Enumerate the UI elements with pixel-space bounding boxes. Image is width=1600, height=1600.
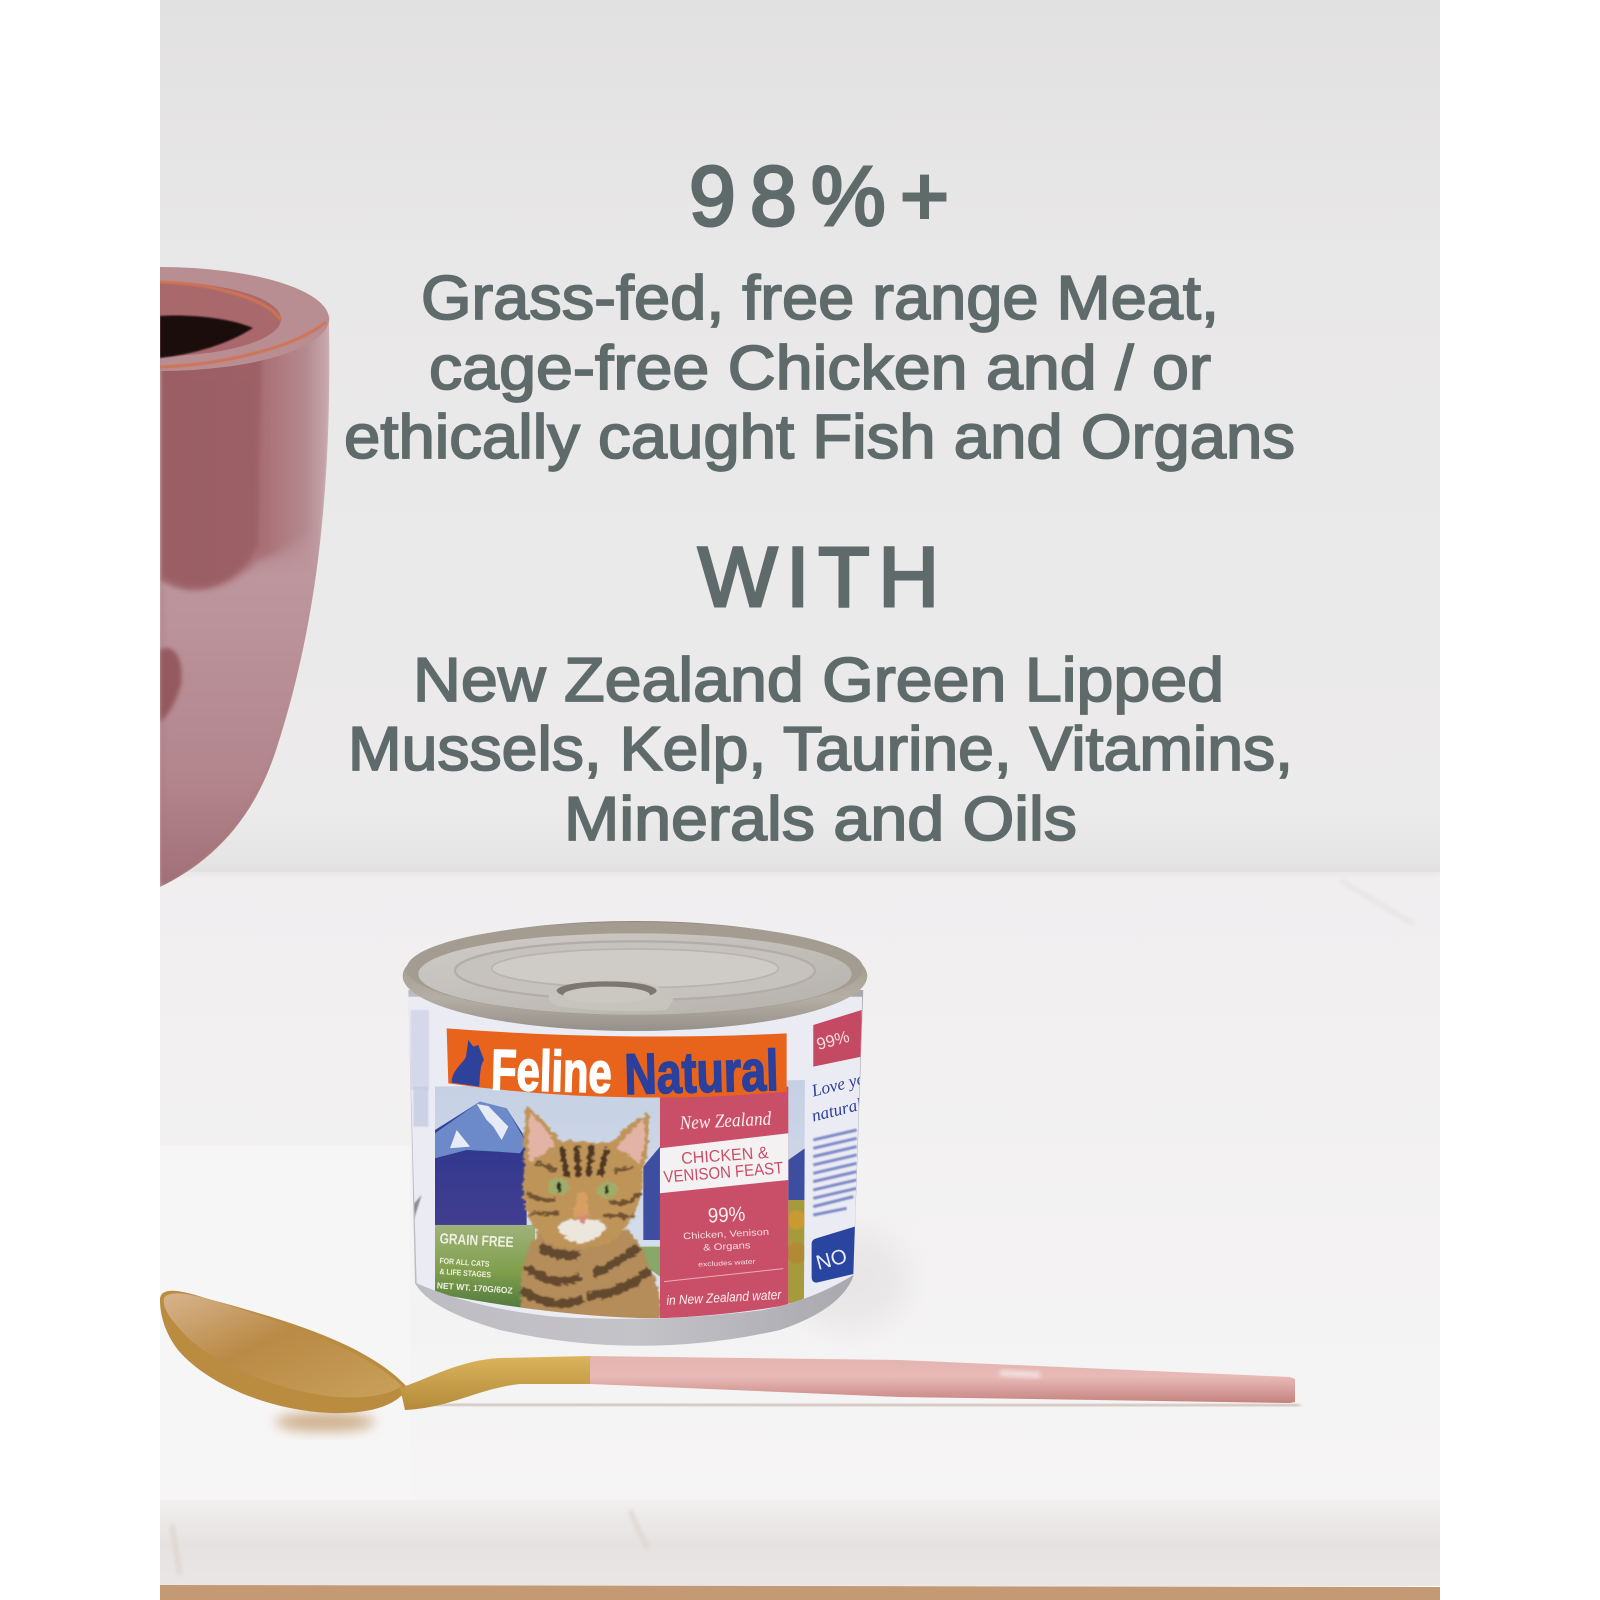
right side copy: Love your <box>809 1065 882 1101</box>
can label text: GRAIN FREE <box>439 1231 514 1251</box>
paragraph: meat description <box>344 264 1295 472</box>
side panel left <box>411 1010 429 1127</box>
can label text: New Zealand <box>678 1109 772 1134</box>
can label text: & LIFE STAGES <box>439 1267 492 1280</box>
can label <box>407 993 882 1327</box>
paragraph: supplements description <box>348 646 1293 854</box>
can label text: CHICKEN & <box>681 1143 769 1168</box>
can label text: 99% <box>707 1203 746 1228</box>
infographic: product photo scene <box>160 0 1440 1600</box>
can <box>403 921 882 1346</box>
wall background <box>160 0 1440 874</box>
spoon neck <box>400 1356 590 1410</box>
marble table top <box>150 872 1440 1502</box>
marble slab front edge <box>160 1500 1440 1586</box>
cup contents <box>160 316 253 358</box>
photo panel <box>160 0 1440 1600</box>
can label text: NET WT. 170G/6OZ <box>437 1280 514 1296</box>
cup rim <box>160 267 329 371</box>
right side copy: naturally <box>810 1092 876 1126</box>
cup <box>160 267 330 887</box>
paragraph: supplements description: New Zealand Green Lipped <box>413 646 1224 715</box>
meadow <box>435 1225 535 1318</box>
can body <box>408 990 863 1346</box>
paragraph: supplements description: Minerals and Oils <box>564 785 1077 854</box>
pull tab <box>549 981 673 1011</box>
right side badge text <box>814 1027 852 1275</box>
right side text lines <box>813 1130 857 1215</box>
right side badges <box>813 1010 862 1067</box>
paragraph: meat description: ethically caught Fish and Organs <box>344 403 1295 472</box>
can shadow <box>818 1238 901 1325</box>
stat: 98%+: 98%+ <box>689 149 949 243</box>
can label text: Natural <box>624 1039 779 1107</box>
spoon <box>160 1291 1295 1413</box>
right side badge text: NO <box>814 1245 850 1275</box>
right side badge text: 99% <box>814 1027 852 1054</box>
spoon handle <box>590 1356 1295 1403</box>
can label text: Feline <box>490 1038 613 1105</box>
can label text: VENISON FEAST <box>663 1158 784 1187</box>
can label text: FOR ALL CATS <box>439 1256 490 1269</box>
paragraph: supplements description: Mussels, Kelp, Taurine, Vitamins, <box>348 715 1293 784</box>
can label text: in New Zealand water <box>666 1287 782 1308</box>
table edge shadow under wall <box>160 866 1440 876</box>
spoon shadow <box>275 1404 1300 1432</box>
can label text: excludes water <box>698 1259 757 1269</box>
wooden surface under slab <box>160 1585 1440 1600</box>
headline text block <box>344 149 1295 854</box>
right side copy <box>809 1065 882 1126</box>
can label text: & Organs <box>703 1240 751 1253</box>
cat <box>521 1106 662 1320</box>
photo on label <box>435 1080 807 1327</box>
can rim and lid <box>403 921 867 1031</box>
can label text <box>437 1038 784 1308</box>
heading: WITH: WITH <box>698 530 939 624</box>
orange logo band <box>447 1028 787 1098</box>
blue cat logo <box>452 1040 484 1087</box>
paragraph: meat description: Grass-fed, free range Meat, <box>421 264 1219 333</box>
spoon bowl <box>160 1291 408 1413</box>
can label text: Chicken, Venison <box>683 1227 769 1241</box>
paragraph: meat description: cage-free Chicken and / or <box>429 334 1211 403</box>
red product panel <box>660 1087 788 1327</box>
mountain <box>435 1102 527 1225</box>
